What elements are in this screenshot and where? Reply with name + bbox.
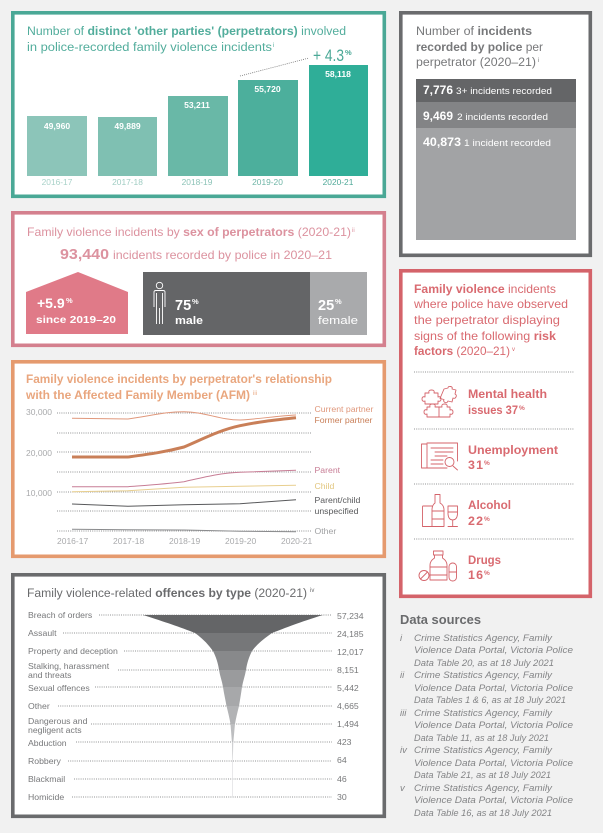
total incidents text: incidents recorded by police in 2020–21 [113,248,332,262]
source list: iv [400,745,408,756]
funnel chart: offences: Dangerous and [28,716,88,726]
bar chart: perpetrators by year: 2016-17 [42,177,73,187]
stacked block: incidents recorded: 1 incident recorded [464,138,551,148]
source list: Violence Data Portal, Victoria Police [414,683,573,694]
stacked block: incidents recorded: 9,469 [423,111,453,123]
icon: person [154,282,165,324]
funnel chart: offences: 46 [337,774,347,784]
bar chart: perpetrators by year: 49,889 [114,121,141,131]
panel: distinct other parties [13,13,384,196]
line chart: relationship trend: unspecified [314,506,359,516]
icon: puzzle pieces [422,386,456,417]
panel: risk factors [401,271,590,596]
funnel chart: offences: Robbery [28,756,61,766]
bar chart: perpetrators by year: 2017-18 [112,177,143,187]
line chart: relationship trend: 2018-19 [169,536,200,546]
heading: relationship [25,372,332,402]
heading: other parties: in police-recorded family violence incidents [27,40,272,54]
source list: Crime Statistics Agency, Family [414,670,553,681]
heading: incidents per perpetrator: Number of incidents [416,24,532,38]
heading: risk factors: v [512,347,515,353]
heading: data sources: Data sources [400,612,481,627]
source list: Crime Statistics Agency, Family [414,745,553,756]
bar chart: perpetrators by year: 55,720 [254,84,281,94]
panel: perpetrator relationship [13,362,384,556]
bar chart: perpetrators by year: 53,211 [184,100,210,110]
stacked block: incidents recorded: 2 incidents recorded [457,112,548,122]
line chart: relationship trend [26,404,374,546]
line chart: relationship trend: 10,000 [26,488,52,498]
heading: other parties: i [273,43,274,49]
funnel chart: offences: Assault [28,628,57,638]
risk factor: unemployment: Unemployment [468,443,558,457]
house: +5.9% since 2019-20: % [66,296,73,305]
bar: female share: 25 [318,298,334,314]
line chart: relationship trend: 2019-20 [225,536,256,546]
callout: +4.3% [240,47,352,76]
icon: newspaper and magnifier [422,443,458,470]
heading: offences: iv [310,588,314,594]
risk factor: alcohol: 22 [468,514,483,528]
funnel chart: offences: Blackmail [28,774,65,784]
bar: male share: 75 [175,298,191,314]
funnel chart: offences: Property and deception [28,646,118,656]
heading: sex of perpetrators: Family violence incidents by sex of perpetrators (2020-21) [27,225,351,239]
panel: incidents per perpetrator [401,13,590,255]
bar: female share [310,272,367,335]
risk factor: drugs: 16 [468,568,483,582]
source list: Data Tables 1 & 6, as at 18 July 2021 [414,695,566,706]
heading: risk factors: signs of the following risk [414,329,556,343]
house: +5.9% since 2019-20 [26,272,128,334]
funnel chart: offences: negligent acts [28,725,82,735]
source list: i [400,633,403,644]
funnel chart: offences: 24,185 [337,629,364,639]
heading: risk factors: where police have observed [413,297,568,311]
source list: Data Table 20, as at 18 July 2021 [414,658,554,669]
risk factor: drugs [419,551,501,582]
callout: +4.3%: + 4.3 [313,47,344,65]
line chart: relationship trend: Other [314,526,336,536]
funnel chart: offences: 12,017 [337,647,364,657]
heading: relationship: iii [253,391,257,397]
risk factor: alcohol: % [484,516,490,523]
funnel chart: offences [28,610,364,802]
source list: Violence Data Portal, Victoria Police [414,795,573,806]
bar chart: perpetrators by year: 2018-19 [182,177,213,187]
heading: incidents per perpetrator: i [538,58,539,64]
heading: offences: Family violence-related offences by type (2020-21) [27,586,307,600]
source list: Violence Data Portal, Victoria Police [414,645,573,656]
stacked block: incidents recorded: 3+ incidents recorded [456,86,552,96]
funnel chart: offences: and threats [28,670,72,680]
risk factor: mental health: Mental health [468,387,547,401]
line chart: relationship trend: Current partner [314,404,374,414]
line chart: relationship trend: Former partner [314,415,373,425]
risk factor: drugs: Drugs [468,553,501,567]
bar: female share: female [318,315,358,327]
heading: risk factors: the perpetrator displaying [414,313,560,327]
line chart: relationship trend: Child [314,481,334,491]
line chart: relationship trend: 2017-18 [113,536,144,546]
risk factor: alcohol: Alcohol [468,498,511,512]
bar: male share: male [175,315,203,327]
source list: Crime Statistics Agency, Family [414,633,553,644]
funnel chart: offences: 423 [337,737,352,747]
icon: pill bottle and pills [419,551,456,581]
heading: relationship: with the Affected Family Member (AFM) [25,388,250,402]
funnel chart: offences: 4,665 [337,701,359,711]
source list: ii [400,670,405,681]
heading: relationship: Family violence incidents by perpetrator's relationship [26,372,332,386]
funnel chart: offences: 8,151 [337,665,359,675]
line chart: relationship trend: 2016-17 [57,536,88,546]
funnel chart: offences: 5,442 [337,683,359,693]
line chart: relationship trend: Parent [314,465,341,475]
callout: +4.3%: % [345,48,352,57]
bar chart: perpetrators by year: 2019-20 [252,177,283,187]
panel: offences by type [13,575,384,816]
line chart: relationship trend: 30,000 [26,407,52,417]
risk factor: unemployment: % [484,460,490,467]
data sources [400,612,573,819]
total incidents text [60,246,332,263]
risk factor: unemployment: 31 [468,458,483,472]
risk factor: alcohol [422,494,511,528]
house: +5.9% since 2019-20: since 2019–20 [36,314,116,326]
heading: other parties [27,24,346,54]
risk factor: drugs: % [484,570,490,577]
risk factor: mental health: % [519,405,525,412]
funnel chart: offences: Stalking, harassment [28,661,110,671]
heading: sex of perpetrators: ii [352,228,355,234]
funnel chart: offences: 57,234 [337,611,364,621]
risk factor: unemployment [422,443,558,472]
funnel chart: offences: 1,494 [337,719,359,729]
source list: Violence Data Portal, Victoria Police [414,758,573,769]
line chart: relationship trend: 2020-21 [281,536,312,546]
house: +5.9% since 2019-20: +5.9 [37,295,65,311]
funnel chart: offences: 64 [337,755,347,765]
heading: risk factors [413,282,568,358]
total incidents text: 93,440 [60,246,109,263]
stacked block: incidents recorded: 40,873 [423,137,461,149]
icon: bottle, box and glass [422,494,458,526]
bar: male share: % [192,297,199,306]
source list: v [400,783,406,794]
source list [400,633,573,819]
bar: male share [143,272,310,335]
heading: incidents per perpetrator: recorded by police per [416,40,543,54]
risk factor: mental health [422,386,547,417]
heading: incidents per perpetrator [416,24,543,69]
panel: sex of perpetrators [13,213,384,345]
funnel chart: offences: Sexual offences [28,683,90,693]
funnel chart: offences: Homicide [28,792,64,802]
risk factor: mental health: issues 37 [468,403,518,417]
bar chart: perpetrators by year: 58,118 [325,69,351,79]
heading: risk factors: factors (2020–21) [414,344,510,358]
funnel chart: offences: Breach of orders [28,610,93,620]
stacked block: incidents recorded [416,79,576,240]
source list: Crime Statistics Agency, Family [414,708,553,719]
heading: incidents per perpetrator: perpetrator (2020–21) [416,55,536,69]
heading: risk factors: Family violence incidents [414,282,556,296]
funnel chart: offences: Other [28,701,50,711]
source list: Data Table 11, as at 18 July 2021 [414,733,549,744]
funnel chart: offences: 30 [337,792,347,802]
source list: Data Table 16, as at 18 July 2021 [414,808,552,819]
stacked block: incidents recorded: 7,776 [423,85,453,97]
source list: Data Table 21, as at 18 July 2021 [414,770,551,781]
line chart: relationship trend: 20,000 [26,448,52,458]
bar: female share: % [335,297,342,306]
source list: iii [400,708,407,719]
source list: Violence Data Portal, Victoria Police [414,720,573,731]
line chart: relationship trend: Parent/child [314,495,361,505]
bar chart: perpetrators by year [27,65,368,187]
heading: other parties: Number of distinct 'other parties' (perpetrators) involved [27,24,346,38]
funnel chart: offences: Abduction [28,738,67,748]
bar chart: perpetrators by year: 2020-21 [323,177,354,187]
bar chart: perpetrators by year: 49,960 [44,121,70,131]
source list: Crime Statistics Agency, Family [414,783,553,794]
